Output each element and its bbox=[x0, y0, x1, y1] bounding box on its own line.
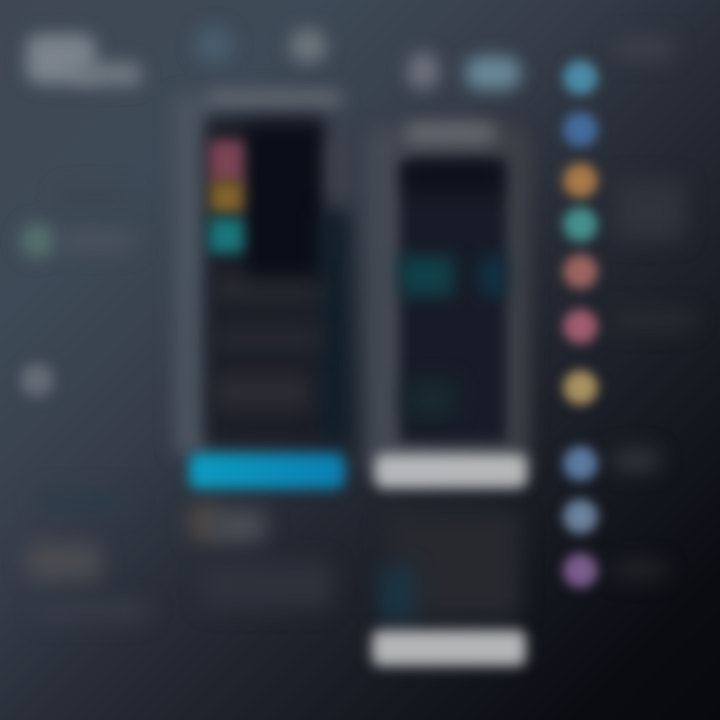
icon: orange circle bbox=[563, 163, 598, 198]
phone top bar bbox=[406, 122, 496, 144]
heading text bbox=[211, 510, 265, 542]
column: right text rows bbox=[611, 38, 684, 580]
top icon: grey circle two bbox=[407, 52, 439, 90]
phone screen bbox=[400, 160, 506, 442]
body rows bbox=[203, 562, 331, 608]
icon: pink circle bbox=[563, 309, 598, 344]
screen teal band right bbox=[480, 258, 506, 296]
icon: blue circle bbox=[563, 112, 598, 147]
text: purple item label bbox=[614, 562, 664, 578]
button: white upper bbox=[375, 454, 527, 488]
text: top label bbox=[616, 38, 672, 58]
screen teal band left bbox=[400, 256, 454, 296]
colour tab: orange bbox=[210, 181, 244, 213]
screen side teal area bbox=[320, 210, 350, 445]
panel: lower card bbox=[375, 515, 522, 626]
icon: slate circle bbox=[563, 499, 598, 534]
text block: teal band bbox=[40, 492, 130, 510]
screen top dark band bbox=[406, 162, 500, 192]
text: blue item label bbox=[614, 450, 658, 470]
text block: below cyan button bbox=[183, 499, 329, 606]
colour tab: teal bbox=[209, 218, 244, 253]
icon: teal circle bbox=[563, 207, 598, 242]
icon: coral circle bbox=[563, 254, 598, 289]
icon: top blue circle bbox=[194, 26, 234, 64]
text block: upper rows bbox=[60, 190, 130, 204]
teal icon block bbox=[381, 567, 413, 621]
button: white lower bbox=[372, 630, 526, 666]
icon: cyan circle bbox=[563, 60, 598, 95]
heading with orange icon bbox=[191, 506, 217, 540]
column: coloured circle icons bbox=[556, 54, 606, 595]
text: middle block bbox=[614, 180, 684, 240]
phone screen bbox=[206, 117, 324, 445]
text: pink item label bbox=[614, 312, 694, 328]
screen lower list rows bbox=[218, 272, 320, 408]
text block: lower rows bbox=[38, 602, 148, 620]
title bbox=[17, 25, 148, 94]
icon: top grey circle bbox=[289, 28, 327, 64]
phone frame bbox=[366, 124, 530, 484]
phone frame bbox=[174, 95, 206, 455]
icon: green circle bbox=[20, 223, 55, 258]
text block: green item label bbox=[62, 232, 134, 250]
top icon: blue pill bbox=[465, 56, 521, 90]
icon: steel blue circle bbox=[563, 446, 598, 481]
button: cyan bbox=[189, 453, 345, 489]
screen side grey area bbox=[328, 135, 350, 205]
colour tab: red bbox=[209, 140, 244, 183]
icon: grey circle bbox=[20, 363, 54, 397]
left column panel bbox=[16, 25, 148, 612]
panel: phone one bbox=[170, 84, 358, 458]
screen upper dark area bbox=[246, 127, 322, 292]
icon: purple circle bbox=[563, 553, 598, 588]
card rows bbox=[385, 511, 520, 619]
phone top bar bbox=[206, 90, 342, 107]
panel: phone two bbox=[360, 114, 536, 480]
screen lower teal band bbox=[406, 380, 456, 418]
text block: orange label bbox=[28, 544, 100, 580]
icon: gold circle bbox=[563, 370, 598, 405]
